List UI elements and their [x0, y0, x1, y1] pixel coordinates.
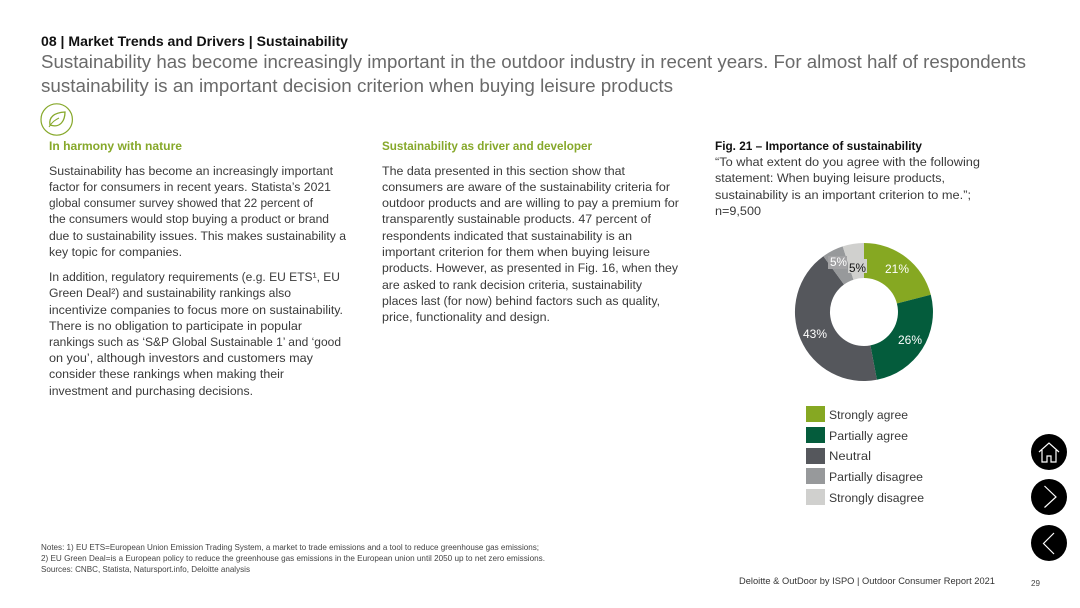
notes and sources: Notes: 1) EU ETS=European Union Emission Trading System, a market to trade emissions and a tool to reduce greenhouse gas emissions; — [41, 542, 539, 552]
text block: second paragraph: on you’, although investors and customers may — [49, 351, 314, 365]
text block: second paragraph: consider these rankings when making their — [49, 367, 284, 381]
text block: survey question — [715, 155, 980, 218]
icon: home button — [1031, 434, 1067, 470]
text block: first paragraph: global consumer survey showed that 22 percent of — [49, 196, 314, 210]
donut chart: 21% — [885, 264, 909, 276]
text block: driver and developer body: The data presented in this section show that — [382, 164, 626, 178]
panel: sustainability as driver and developer — [382, 139, 679, 324]
panel: in harmony with nature — [49, 139, 346, 398]
text block: second paragraph: There is no obligation to participate in popular — [49, 319, 302, 333]
icon: next arrow button — [1031, 479, 1067, 515]
notes and sources: 2) EU Green Deal=is a European policy to reduce the greenhouse gas emissions in the European union until 2050 up to net zero emissions. — [41, 553, 545, 563]
panel: figure 21 importance of sustainability — [715, 139, 980, 505]
text block: second paragraph: incentivize companies to focus more on sustainability. — [49, 303, 343, 317]
subtitle — [41, 52, 1026, 96]
icon: leaf in circle — [41, 104, 72, 135]
heading: sustainability as driver and developer: Sustainability as driver and developer — [382, 139, 592, 153]
heading: in harmony with nature: In harmony with nature — [49, 139, 182, 153]
text block: second paragraph: rankings such as ‘S&P Global Sustainable 1’ and ‘good — [49, 335, 341, 349]
subtitle: sustainability is an important decision criterion when buying leisure products — [41, 76, 673, 96]
text block: driver and developer body: outdoor products and are willing to pay a premium for — [382, 196, 679, 210]
text block: first paragraph: the consumers would stop buying a product or brand — [49, 212, 329, 226]
legend: Strongly agree — [829, 408, 908, 422]
text block: driver and developer body: places last (for now) behind factors such as quality, — [382, 294, 660, 308]
subtitle: Sustainability has become increasingly important in the outdoor industry in recent years. For almost half of respondents — [41, 52, 1026, 72]
text block: driver and developer body: respondents indicated that sustainability is an — [382, 229, 632, 243]
text block: first paragraph: Sustainability has become an increasingly important — [49, 164, 334, 178]
page number: 29 — [1031, 578, 1040, 588]
text block: survey question: statement: When buying leisure products, — [715, 171, 945, 185]
text block: survey question: sustainability is an important criterion to me.”; — [715, 188, 971, 202]
footer: Deloitte & OutDoor by ISPO | Outdoor Consumer Report 2021 — [739, 576, 995, 587]
text block: driver and developer body: transparently sustainable products. 47 percent of — [382, 212, 652, 226]
legend — [806, 406, 924, 505]
text block: driver and developer body — [382, 164, 679, 324]
text block: driver and developer body: are asked to rank decision criteria, sustainability — [382, 278, 643, 292]
text block: second paragraph: Green Deal²) and sustainability rankings also — [49, 286, 291, 300]
text block: driver and developer body: consumers are aware of the sustainability criteria for — [382, 180, 670, 194]
legend: Partially agree — [829, 429, 908, 443]
notes and sources: Sources: CNBC, Statista, Natursport.info, Deloitte analysis — [41, 564, 250, 574]
donut chart: 43% — [803, 329, 827, 341]
icon: back arrow button — [1031, 525, 1067, 561]
donut chart: 5% — [849, 263, 866, 275]
text block: first paragraph — [49, 164, 346, 259]
legend: Partially disagree — [829, 470, 923, 484]
legend: Strongly disagree — [829, 491, 924, 505]
text block: first paragraph: factor for consumers in recent years. Statista’s 2021 — [49, 180, 331, 194]
text block: driver and developer body: price, functionality and design. — [382, 310, 550, 324]
text block: survey question: n=9,500 — [715, 204, 761, 218]
notes and sources — [41, 542, 545, 574]
heading: figure 21: Fig. 21 – Importance of sustainability — [715, 139, 922, 153]
donut chart: 26% — [898, 335, 922, 347]
text block: driver and developer body: important criterion for them when buying leisure — [382, 245, 650, 259]
text block: driver and developer body: products. However, as presented in Fig. 16, when they — [382, 261, 679, 275]
text block: second paragraph — [49, 270, 343, 398]
text block: second paragraph: investment and purchasing decisions. — [49, 384, 253, 398]
donut chart — [795, 243, 933, 381]
text block: first paragraph: due to sustainability issues. This makes sustainability a — [49, 229, 346, 243]
legend: Neutral — [829, 449, 871, 463]
text block: first paragraph: key topic for companies. — [49, 245, 182, 259]
text block: second paragraph: In addition, regulatory requirements (e.g. EU ETS¹, EU — [49, 270, 340, 284]
donut chart: 5% — [830, 257, 847, 269]
title: 08 | Market Trends and Drivers | Sustainability — [41, 34, 348, 49]
text block: survey question: “To what extent do you agree with the following — [715, 155, 980, 169]
